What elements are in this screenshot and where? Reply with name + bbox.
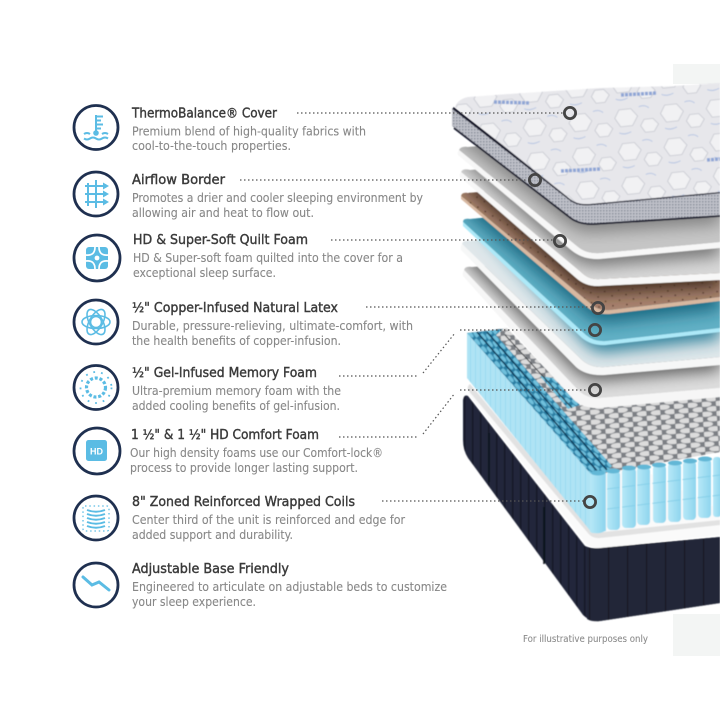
heading: ThermoBalance® Cover [131, 106, 278, 122]
quilted cover top [455, 83, 720, 204]
description: cool-to-the-touch properties. [132, 139, 291, 153]
item: ThermoBalance Cover [74, 106, 366, 153]
layer: HD quilt foam [458, 145, 720, 260]
icon: HD badge: HD [90, 446, 103, 456]
footnote: For illustrative purposes only [523, 634, 648, 645]
icon: quilt square [74, 235, 120, 281]
background panel [673, 64, 720, 656]
description: allowing air and heat to flow out. [132, 206, 314, 220]
description: Engineered to articulate on adjustable beds to customize [132, 580, 447, 594]
heading: ½" Copper-Infused Natural Latex [132, 301, 338, 316]
description [132, 580, 447, 609]
item: HD & Super-Soft Quilt Foam [74, 233, 403, 281]
icon: HD badge [74, 428, 120, 474]
heading: 1 ½" & 1 ½" HD Comfort Foam [131, 428, 319, 443]
description: Center third of the unit is reinforced and edge for [132, 513, 405, 527]
heading: HD & Super-Soft Quilt Foam [133, 233, 308, 248]
airflow border [452, 108, 720, 224]
item: Airflow Border [74, 172, 423, 220]
layer: super-soft quilt foam [461, 168, 720, 287]
foundation comfort layer [468, 384, 720, 548]
description [130, 446, 383, 475]
description [132, 384, 341, 413]
icon: adjustable bed line [74, 563, 118, 607]
icon: atom flower [74, 300, 118, 344]
item: Zoned Reinforced Wrapped Coils [74, 495, 405, 542]
description: Ultra-premium memory foam with the [132, 384, 341, 398]
callout markers [529, 107, 604, 508]
description: your sleep experience. [132, 595, 256, 609]
icon: thermometer over water [74, 106, 118, 150]
base foundation [463, 396, 720, 621]
description [132, 124, 366, 153]
heading: 8" Zoned Reinforced Wrapped Coils [132, 495, 355, 510]
item: Adjustable Base Friendly [74, 562, 447, 609]
item: HD Comfort Foam [74, 428, 383, 475]
description: Durable, pressure-relieving, ultimate-comfort, with [132, 319, 413, 333]
layer: gel-infused memory foam [462, 217, 720, 346]
layer: upper HD comfort foam [462, 240, 720, 376]
description: Our high density foams use our Comfort-lock® [130, 446, 383, 460]
description: HD & Super-soft foam quilted into the cover for a [133, 251, 403, 265]
description: the health benefits of copper-infusion. [132, 334, 341, 348]
icon: airflow arrows [74, 172, 118, 216]
icon: gel beads [74, 366, 118, 410]
description [132, 191, 423, 220]
description: exceptional sleep surface. [133, 266, 276, 280]
heading: ½" Gel-Infused Memory Foam [132, 366, 317, 381]
heading: Adjustable Base Friendly [132, 562, 289, 577]
item: Copper-Infused Natural Latex [74, 300, 413, 348]
item: Gel-Infused Memory Foam [74, 366, 341, 413]
mattress illustration [440, 83, 720, 621]
wrapped coil unit [467, 328, 720, 533]
description: Premium blend of high-quality fabrics with [132, 124, 366, 138]
layer: lower HD comfort foam [464, 266, 720, 409]
description: process to provide longer lasting support. [130, 461, 358, 475]
description: added cooling benefits of gel-infusion. [132, 399, 340, 413]
dotted leader lines [240, 113, 592, 501]
description: added support and durability. [132, 528, 293, 542]
description [133, 251, 403, 280]
icon: coil [74, 496, 118, 540]
description: Promotes a drier and cooler sleeping environment by [132, 191, 423, 205]
description [132, 513, 405, 542]
layer: copper-infused latex [460, 192, 720, 315]
description [132, 319, 413, 348]
heading: Airflow Border [132, 173, 226, 188]
